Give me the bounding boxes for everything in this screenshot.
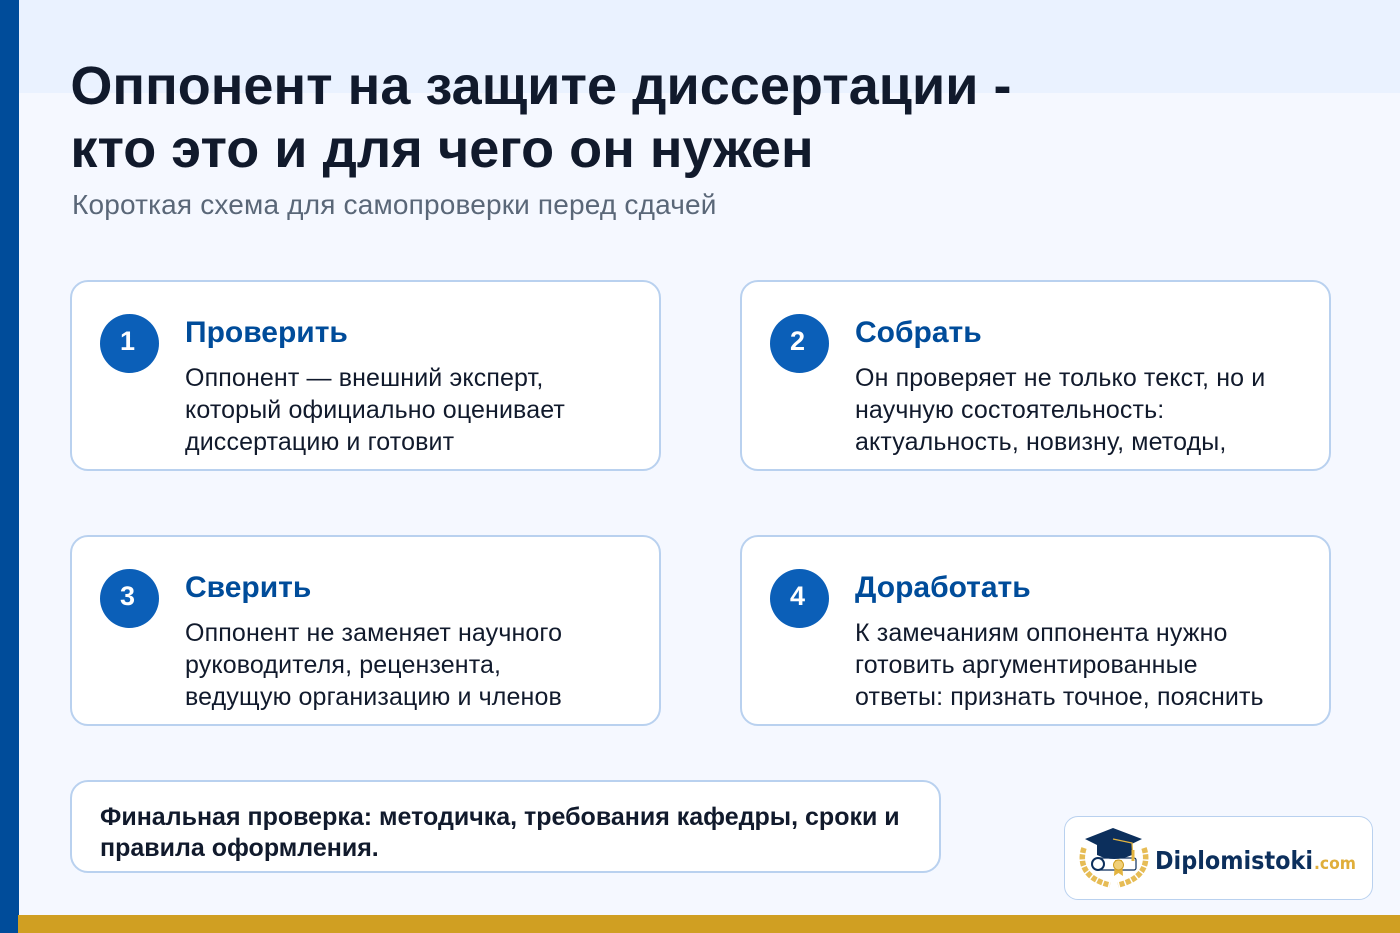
- step 2 text: актуальность, новизну, методы,: [855, 428, 1226, 456]
- step 1 text: [185, 364, 565, 456]
- step 1 text: диссертацию и готовит: [185, 428, 454, 456]
- left accent bar: [0, 0, 19, 933]
- step 2 text: научную состоятельность:: [855, 396, 1164, 424]
- step 3 text: [185, 618, 562, 710]
- title: кто это и для чего он нужен: [70, 119, 814, 179]
- icon: diploma scroll: [1092, 858, 1136, 876]
- panel: step 1: [70, 280, 661, 471]
- step 4 text: ответы: признать точное, пояснить: [855, 682, 1264, 710]
- top header band: [18, 0, 1400, 93]
- step 3 text: руководителя, рецензента,: [185, 650, 501, 678]
- step 4 text: готовить аргументированные: [855, 650, 1198, 678]
- logo wordmark: Diplomistoki: [1155, 846, 1313, 875]
- step 3 heading: Сверить: [185, 571, 311, 604]
- bottom gold bar: [18, 915, 1400, 933]
- step 3 text: ведущую организацию и членов: [185, 682, 562, 710]
- step 2 number: [770, 314, 829, 373]
- panel: step 3: [70, 535, 661, 726]
- logo graphic: [1080, 828, 1356, 888]
- callout: final check: [70, 780, 941, 873]
- step 4 heading: Доработать: [855, 571, 1031, 604]
- panel: step 4: [740, 535, 1331, 726]
- panel: step 2: [740, 280, 1331, 471]
- subtitle: Короткая схема для самопроверки перед сдачей: [72, 189, 717, 220]
- step 3 text: Оппонент не заменяет научного: [185, 618, 562, 646]
- callout text: Финальная проверка: методичка, требования кафедры, сроки и: [100, 803, 900, 831]
- title: [70, 56, 1012, 179]
- step 1 heading: Проверить: [185, 316, 348, 349]
- callout text: [100, 803, 900, 862]
- callout text: правила оформления.: [100, 834, 379, 862]
- step 4 text: [855, 618, 1264, 710]
- step 4 number: 4: [790, 581, 805, 611]
- step 2 text: Он проверяет не только текст, но и: [855, 364, 1265, 392]
- step 4 text: К замечаниям оппонента нужно: [855, 618, 1228, 646]
- step 3 number: 3: [120, 581, 135, 611]
- logo domain: .com: [1314, 854, 1356, 874]
- icon: graduation cap: [1085, 828, 1142, 861]
- step 1 text: который официально оценивает: [185, 396, 565, 424]
- icon: laurel wreath: [1082, 848, 1146, 885]
- step 1 text: Оппонент — внешний эксперт,: [185, 364, 543, 392]
- step 4 number: [770, 569, 829, 628]
- step 2 heading: Собрать: [855, 316, 982, 349]
- step 2 number: 2: [790, 326, 805, 356]
- step 3 number: [100, 569, 159, 628]
- title: Оппонент на защите диссертации -: [70, 56, 1012, 116]
- step 2 text: [855, 364, 1265, 456]
- step 1 number: 1: [120, 326, 135, 356]
- logo card: [1064, 816, 1373, 900]
- step 1 number: [100, 314, 159, 373]
